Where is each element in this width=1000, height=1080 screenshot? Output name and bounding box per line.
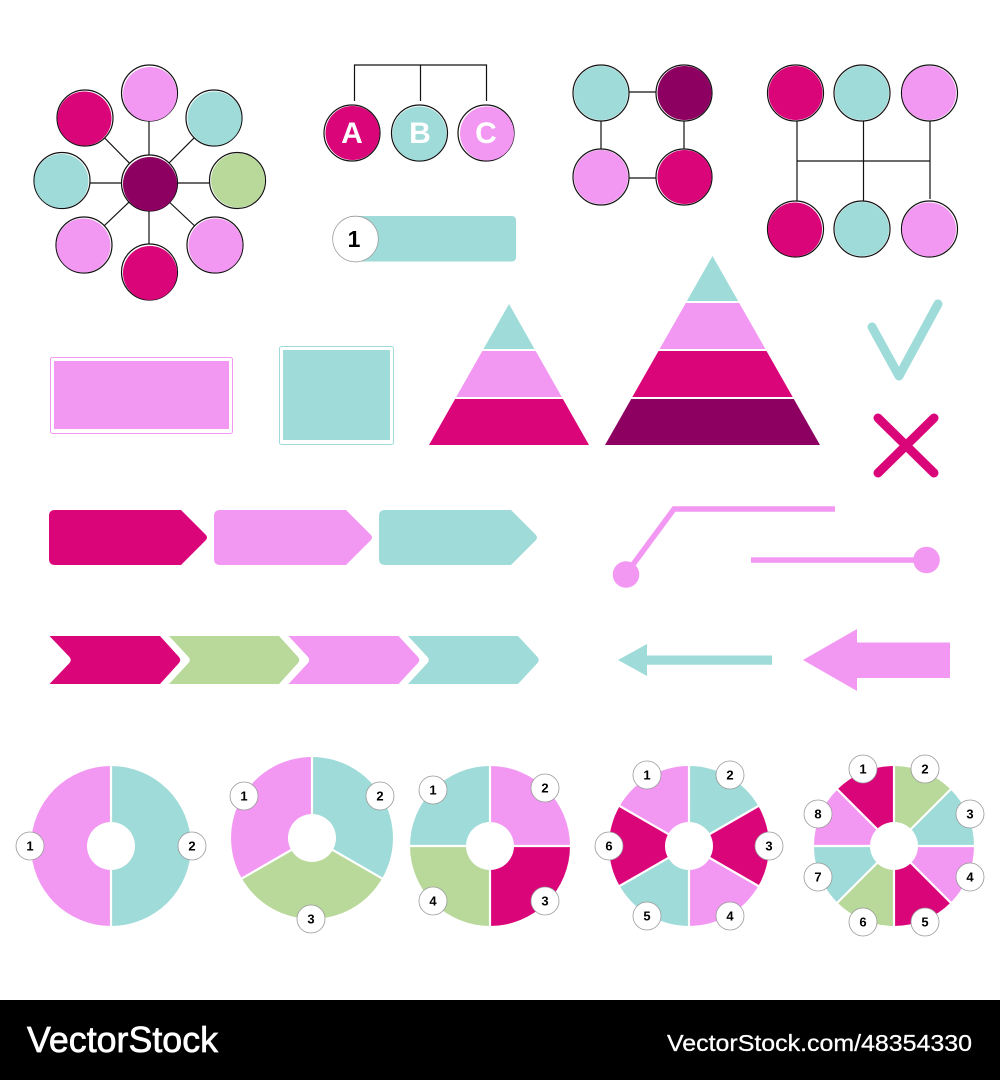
four level pyramid: [605, 256, 820, 445]
badge 4: 4: [966, 870, 974, 884]
chevron process row: [50, 636, 539, 684]
badge 4: [716, 902, 744, 930]
badge 1: 1: [859, 762, 867, 776]
badge 2: 2: [921, 762, 929, 776]
arrow label row: [49, 510, 537, 565]
node top right: [186, 90, 242, 146]
badge 2: 2: [188, 838, 196, 854]
thick pink left arrow: [803, 629, 950, 691]
teal chevron: [408, 636, 539, 684]
badge 8: 8: [814, 806, 822, 822]
numbered label bar: 1: [348, 226, 361, 252]
badge 6: [595, 832, 623, 860]
badge 6: 6: [605, 838, 613, 854]
hub and spoke network diagram: [34, 65, 266, 300]
hub node: [122, 155, 178, 211]
badge 1: 1: [240, 788, 248, 804]
node bottom: [122, 244, 178, 300]
magenta chevron: [50, 636, 180, 684]
badge 5: [911, 908, 939, 936]
badge 3: 3: [307, 912, 315, 926]
badge 1: 1: [643, 768, 651, 782]
magenta arrow label: [49, 510, 207, 565]
node bottom left: [56, 217, 112, 273]
donut chart: three segments: [230, 755, 394, 933]
badge 3: [297, 905, 325, 933]
badge 2: 2: [726, 768, 734, 782]
badge 4: [956, 863, 984, 891]
node bottom right: [187, 217, 243, 273]
node A: [324, 105, 380, 161]
badge 3: [956, 800, 984, 828]
pink arrow label: [214, 510, 372, 565]
badge 2: [716, 761, 744, 789]
badge 6: [849, 908, 877, 936]
donut chart: six segments: [595, 761, 783, 930]
node C: [458, 105, 514, 161]
badge 1: 1: [26, 838, 34, 854]
badge 7: [804, 863, 832, 891]
node top left: [57, 90, 113, 146]
node top: [122, 65, 178, 121]
node C: C: [475, 117, 497, 150]
badge 3: 3: [765, 838, 773, 854]
badge 1: [16, 832, 44, 860]
teal framed square: [280, 346, 394, 444]
badge 3: [531, 887, 559, 915]
badge 7: 7: [814, 870, 822, 884]
A B C tree diagram: [324, 65, 514, 161]
icon: check mark: [872, 304, 938, 376]
badge 2: [366, 782, 394, 810]
teal arrow label: [379, 510, 537, 565]
square four node network: [573, 65, 712, 205]
badge 3: 3: [541, 894, 549, 908]
badge 4: 4: [726, 908, 734, 924]
pink framed rectangle: [50, 358, 232, 434]
badge 1: [419, 776, 447, 804]
badge 2: [178, 832, 206, 860]
badge 1: [849, 755, 877, 783]
badge 3: 3: [966, 806, 974, 822]
straight callout line with dot: [751, 547, 940, 573]
badge 6: 6: [859, 914, 867, 930]
thin teal left arrow: [618, 644, 772, 676]
node B: B: [409, 117, 431, 150]
badge 2: [911, 755, 939, 783]
badge 8: [804, 800, 832, 828]
numbered label bar: [333, 216, 516, 262]
badge 2: 2: [376, 788, 384, 804]
image id url: VectorStock.com/48354330: [667, 1030, 972, 1056]
icon: cross mark: [878, 418, 934, 473]
donut chart: eight segments: [804, 755, 984, 936]
three level pyramid: [429, 304, 589, 445]
badge 2: 2: [541, 780, 549, 796]
badge 5: 5: [921, 914, 929, 930]
node A: A: [341, 117, 363, 150]
donut chart: two segments: [16, 764, 206, 928]
green chevron: [169, 636, 299, 684]
angled callout line with dot: [613, 509, 835, 588]
node B: [392, 105, 448, 161]
badge 2: [531, 774, 559, 802]
badge 4: 4: [429, 894, 437, 908]
badge 1: [633, 761, 661, 789]
badge 1: 1: [429, 782, 437, 798]
badge 3: [755, 832, 783, 860]
donut chart: four segments: [408, 764, 572, 928]
badge 1: [230, 782, 258, 810]
two by three linked node grid: [768, 65, 958, 257]
badge 4: [419, 887, 447, 915]
node right: [210, 152, 266, 208]
badge 5: 5: [643, 908, 651, 924]
footer watermark bar: [0, 1000, 1000, 1080]
pink chevron: [288, 636, 419, 684]
node left: [34, 152, 90, 208]
badge 5: [633, 902, 661, 930]
brand name: VectorStock: [27, 1019, 219, 1060]
